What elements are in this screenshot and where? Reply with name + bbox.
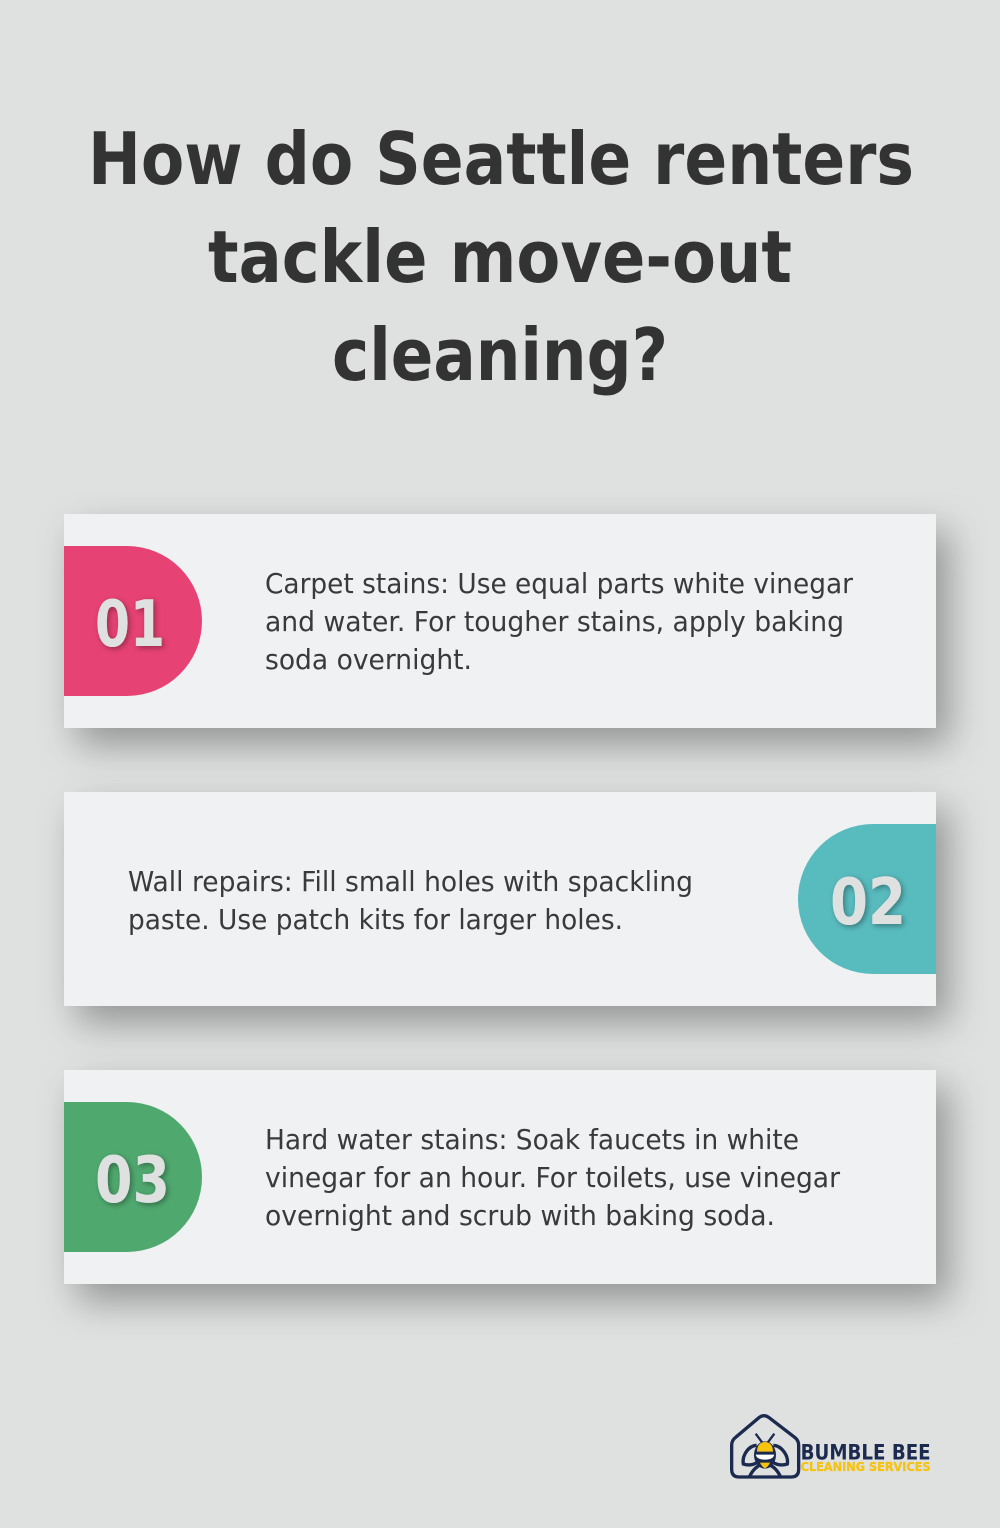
- card 02 background: [64, 792, 936, 1006]
- badge 02: [798, 824, 936, 974]
- text: wall repairs: paste. Use patch kits for larger holes.: [128, 903, 623, 936]
- text: carpet stains: Carpet stains: Use equal parts white vinegar: [265, 567, 854, 600]
- title: cleaning?: [332, 314, 668, 398]
- logo wordmark: BUMBLE BEE: [801, 1440, 931, 1465]
- text: hard water stains: Hard water stains: Soak faucets in white: [265, 1123, 799, 1156]
- logo: Bumble Bee Cleaning Services: [732, 1416, 931, 1477]
- badge 03: [64, 1102, 202, 1252]
- card 03 background: [64, 1070, 936, 1284]
- panel: step 03 hard water stains: [64, 1070, 936, 1284]
- logo wordmark: [801, 1440, 931, 1474]
- logo wordmark: CLEANING SERVICES: [801, 1460, 931, 1474]
- number 01: 01: [95, 588, 165, 662]
- text: carpet stains: soda overnight.: [265, 643, 472, 676]
- panel: step 01 carpet stains: [64, 514, 936, 728]
- text: carpet stains: [265, 567, 854, 676]
- card 01 background: [64, 514, 936, 728]
- icon: house with bee: [732, 1416, 799, 1477]
- panel: step 02 wall repairs: [64, 792, 936, 1006]
- title: tackle move-out: [208, 216, 792, 300]
- text: wall repairs: Wall repairs: Fill small holes with spackling: [128, 865, 693, 898]
- text: hard water stains: overnight and scrub with baking soda.: [265, 1199, 775, 1232]
- text: hard water stains: vinegar for an hour. For toilets, use vinegar: [265, 1161, 841, 1194]
- text: hard water stains: [265, 1123, 841, 1232]
- number 03: 03: [95, 1144, 170, 1218]
- text: carpet stains: and water. For tougher stains, apply baking: [265, 605, 844, 638]
- text: wall repairs: [128, 865, 693, 936]
- badge 01: [64, 546, 202, 696]
- number 02: 02: [830, 866, 906, 940]
- title: [88, 118, 914, 398]
